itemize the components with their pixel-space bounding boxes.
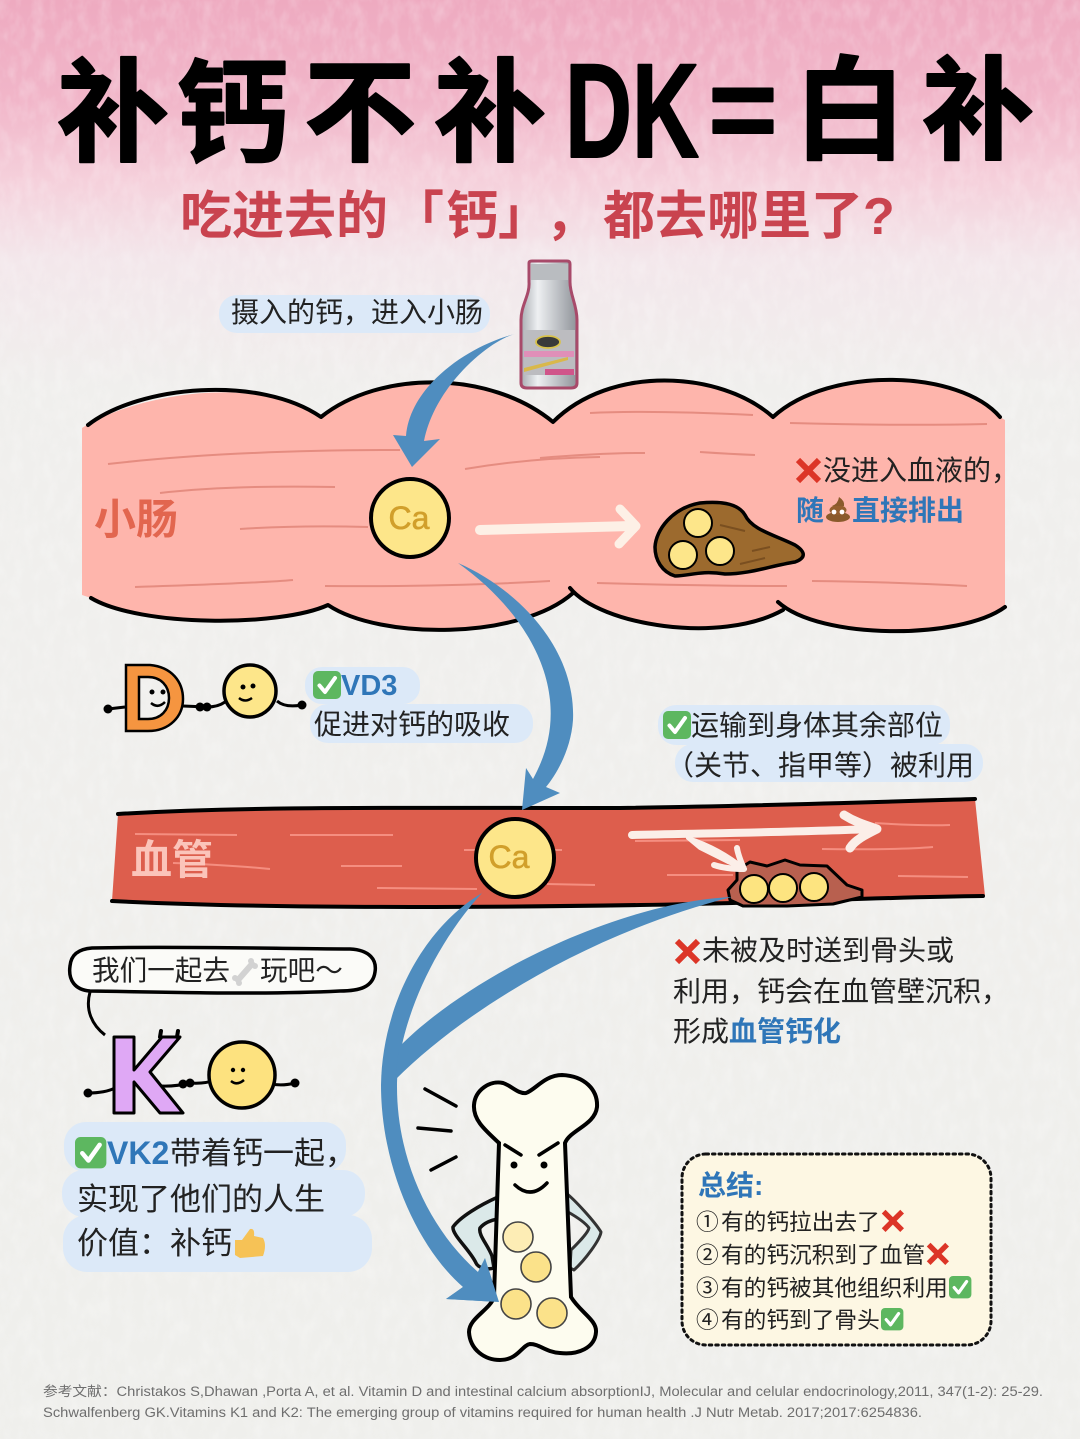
arrow: white vessel flow: [632, 815, 877, 869]
icon: red cross: [798, 460, 819, 481]
title: 补: [57, 51, 169, 176]
title: 白: [794, 49, 906, 174]
panel: summary: 有的钙到了骨头: [721, 1307, 880, 1333]
title: =: [709, 44, 777, 176]
title: 不: [304, 51, 416, 176]
panel: summary: 有的钙拉出去了: [721, 1209, 880, 1235]
subtitle: 「: [392, 188, 444, 246]
callout: VD3: [305, 667, 533, 743]
calcium in vessel: [476, 819, 554, 897]
text: not absorbed, excreted: 直接排出: [852, 495, 964, 526]
calcium in vessel: Ca: [489, 839, 530, 875]
icon: bottle of calcium: [521, 261, 577, 388]
panel: summary: [682, 1154, 991, 1345]
arrow: deposit branch: [395, 897, 732, 1080]
references: Schwalfenberg GK.Vitamins K1 and K2: The emerging group of vitamins required for human health .J Nutr Metab. 2017;2017:6254836.: [43, 1405, 922, 1420]
callout: VK2: 实现了他们的人生: [77, 1182, 325, 1217]
icon: poop emoji: [826, 497, 850, 522]
panel: blood vessel: [112, 799, 985, 907]
callout: transported to other tissue: 运输到身体其余部位: [691, 710, 943, 741]
callout: VK2: 价值：补钙: [77, 1226, 232, 1261]
arrow: vessel to bone: [381, 893, 499, 1302]
callout: vascular calcification: 利用，钙会在血管壁沉积，: [673, 976, 1009, 1007]
panel: small intestine: [82, 380, 1005, 631]
subtitle: 都去哪里了: [603, 188, 863, 246]
title: 钙: [176, 52, 288, 177]
stool with calcium: [655, 502, 803, 576]
text: not absorbed, excreted: 随: [796, 495, 824, 526]
character: bone: [418, 1075, 601, 1360]
references: 参考文献：Christakos S,Dhawan ,Porta A, et al. Vitamin D and intestinal calcium absorptionIJ, Molecular and celular endocrinology,2011, 347(1-2): 25-29.: [43, 1383, 1043, 1399]
subtitle: 吃进去的: [180, 188, 388, 246]
title: 补: [434, 51, 546, 176]
arrow head over bone: [446, 1258, 499, 1302]
title: [57, 37, 1034, 186]
panel: summary: ①: [696, 1209, 719, 1235]
label: 小肠: 小肠: [94, 496, 178, 543]
heading: summary: 总结:: [698, 1170, 763, 1201]
references: [43, 1383, 1043, 1420]
panel: summary: ②: [696, 1242, 719, 1268]
callout: transported to other tissue: [658, 705, 983, 782]
text: not absorbed, excreted: 没进入血液的，: [823, 455, 1019, 486]
arrow: intestine to vessel: [458, 563, 573, 810]
callout: vascular calcification: 形成血管钙化: [673, 1016, 841, 1047]
panel: summary: 有的钙沉积到了血管: [721, 1242, 925, 1268]
arrow: into intestine: [393, 334, 515, 467]
subtitle: [180, 188, 895, 246]
calcium in intestine: Ca: [389, 500, 430, 536]
icon: bone emoji: [232, 958, 258, 986]
action lines: [418, 1089, 456, 1170]
character: vitamin K: [84, 1031, 300, 1113]
label: intake highlight: 摄入的钙，进入小肠: [231, 297, 483, 328]
title: DK: [565, 37, 699, 186]
panel: summary: ③: [696, 1275, 719, 1301]
callout: vascular calcification: 未被及时送到骨头或: [702, 935, 954, 966]
subtitle: ，: [545, 188, 597, 246]
arrow: white intestine flow: [480, 509, 636, 544]
callout: transported to other tissue: （关节、指甲等）被利用: [666, 750, 974, 781]
subtitle: 钙: [446, 188, 498, 246]
callout: VD3: VD3: [341, 670, 397, 702]
speech bubble: 玩吧～: [260, 955, 343, 986]
subtitle: ?: [863, 188, 895, 246]
panel: summary: 有的钙被其他组织利用: [721, 1275, 948, 1301]
label: 血管: 血管: [131, 837, 213, 883]
callout: VK2: [62, 1122, 372, 1272]
icon: thumbs up: [235, 1229, 265, 1258]
text: not absorbed, excreted: [796, 455, 1019, 526]
subtitle: 」: [498, 188, 550, 246]
calcium deposit on vessel wall: [728, 860, 862, 906]
title: 补: [922, 49, 1034, 174]
callout: VK2: 带着钙一起，: [170, 1136, 356, 1171]
callout: VK2: VK2: [107, 1135, 169, 1171]
calcium in intestine: [371, 479, 449, 557]
callout: vascular calcification: [673, 935, 1009, 1047]
callout: VD3: 促进对钙的吸收: [314, 709, 510, 740]
panel: summary: ④: [696, 1307, 719, 1333]
speech bubble: [70, 947, 375, 1035]
speech bubble: 我们一起去: [92, 955, 230, 986]
character: vitamin D: [104, 665, 306, 731]
